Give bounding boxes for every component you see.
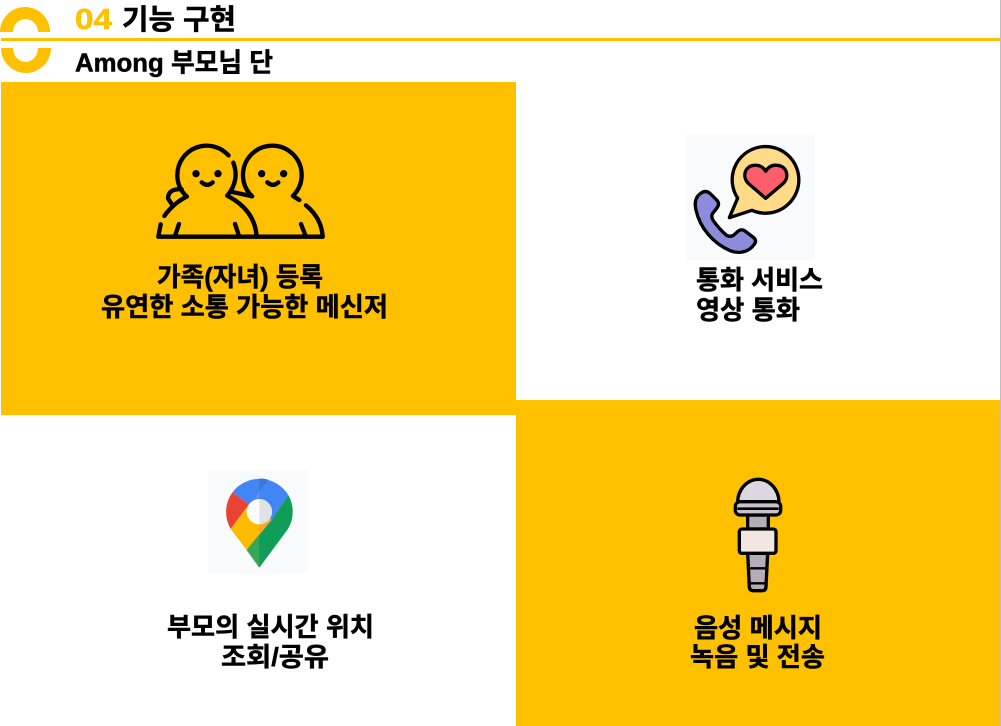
heading: section title: 04 — [75, 4, 112, 36]
text: location caption — [167, 612, 374, 672]
panel: voice message — [516, 400, 1000, 726]
text: call service caption: 통화 서비스 — [696, 265, 823, 295]
text: voice message caption — [690, 613, 825, 672]
icon: phone with heart bubble — [686, 135, 815, 260]
text: call service caption — [696, 265, 823, 325]
heading: section title — [75, 4, 236, 36]
text: family registration caption: 유연한 소통 가능한 메신저 — [101, 292, 388, 322]
icon: two friends — [158, 146, 323, 237]
header divider line — [1, 38, 1000, 41]
icon: map pin — [208, 470, 308, 573]
header ring: bottom half — [1, 48, 51, 73]
panel: family registration — [1, 82, 516, 415]
header ring: top half — [0, 7, 50, 32]
heading: section title: 기능 구현 — [122, 4, 236, 35]
text: voice message caption: 녹음 및 전송 — [690, 642, 825, 672]
text: location caption: 조회/공유 — [221, 642, 329, 672]
subheading: team name: Among 부모님 단 — [75, 48, 273, 78]
text: call service caption: 영상 통화 — [696, 295, 800, 325]
text: family registration caption: 가족(자녀) 등록 — [157, 262, 323, 292]
text: family registration caption — [101, 262, 388, 322]
icon: microphone — [735, 479, 781, 591]
text: location caption: 부모의 실시간 위치 — [167, 612, 374, 642]
text: voice message caption: 음성 메시지 — [694, 613, 822, 643]
